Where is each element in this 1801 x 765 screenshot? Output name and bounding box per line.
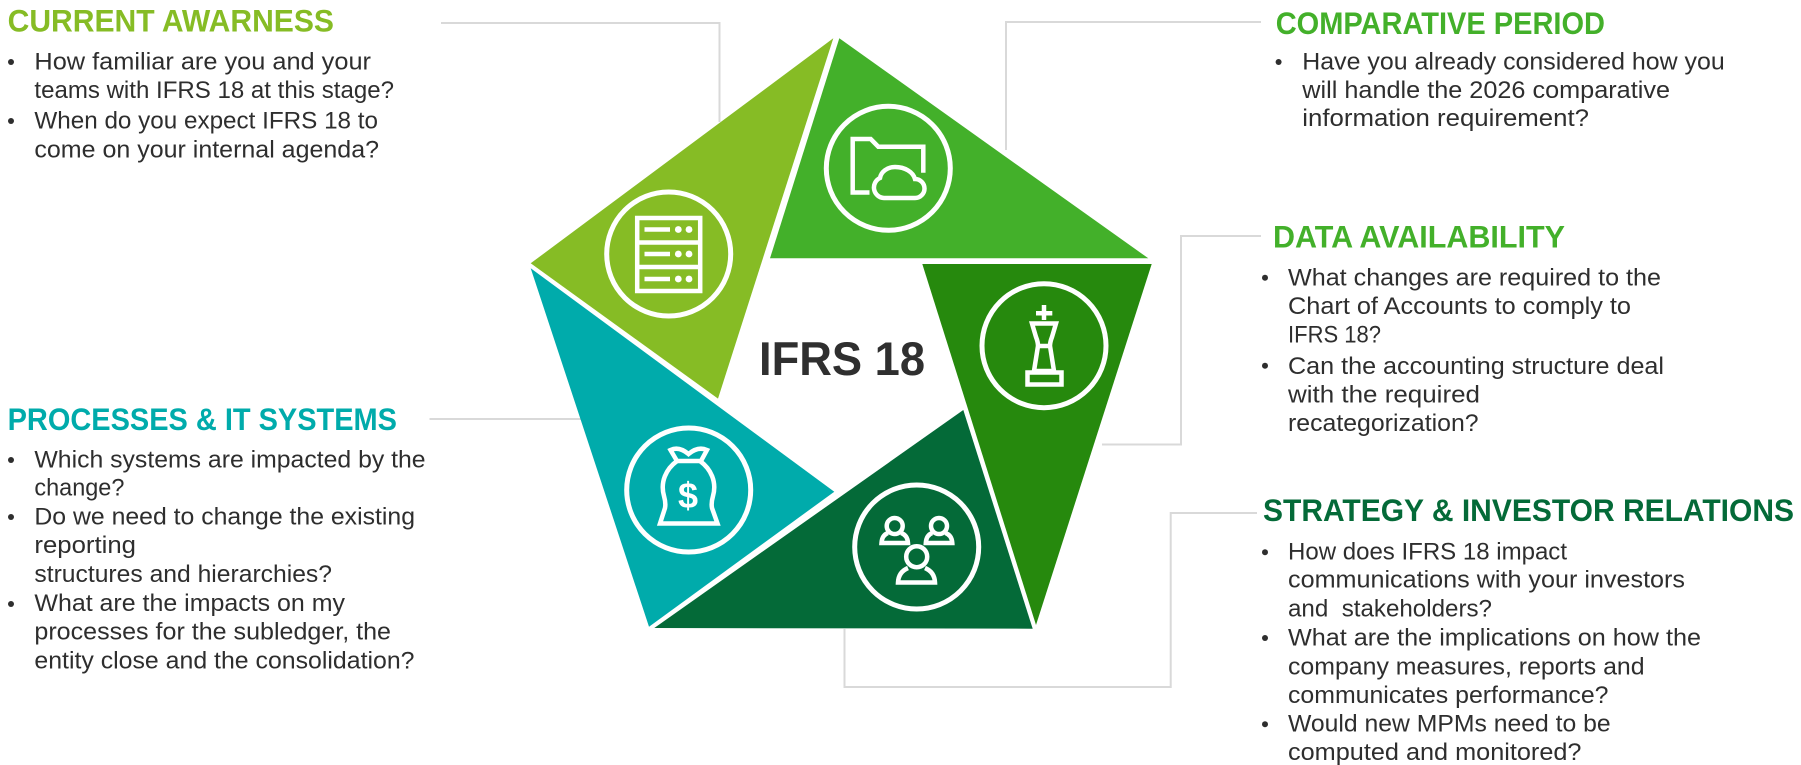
connector: strategy and investor relations [844,513,1257,687]
heading: DATA AVAILABILITY [1273,218,1565,254]
bullet list: change? [34,475,124,502]
bullet list [1262,538,1701,765]
heading: CURRENT AWARNESS [8,3,334,39]
icon: money bag [660,449,718,524]
segment: processes and IT systems [531,268,834,627]
bullet list: reporting [34,532,136,559]
bullet list: information requirement? [1302,105,1589,132]
pentagon diagram [531,38,1152,629]
panel: processes and IT systems [8,401,426,674]
heading: COMPARATIVE PERIOD [1276,5,1605,41]
segment: comparative period [770,38,1148,258]
bullet list [8,48,394,163]
panel: current awareness [8,3,394,163]
segment: current awareness [531,38,833,399]
connector: comparative period [1006,22,1261,150]
panel: comparative period [1276,5,1725,132]
bullet list: teams with IFRS 18 at this stage? [34,77,394,104]
bullet list: When do you expect IFRS 18 to [34,107,378,134]
heading: PROCESSES & IT SYSTEMS [8,401,397,437]
icon: chess king [1028,305,1062,384]
icon: server rack [637,218,700,291]
icon: three people [882,518,952,582]
bullet list: Can the accounting structure deal [1288,353,1664,380]
segment: strategy and investor relations [654,410,1033,629]
bullet list: Which systems are impacted by the [34,446,426,473]
connector: processes and IT systems [430,418,582,420]
bullet list [1262,265,1664,437]
bullet list: and stakeholders? [1288,595,1492,622]
center label: IFRS 18 [759,332,925,385]
bullet list: What changes are required to the [1288,265,1661,292]
icon: folder with cloud [853,139,924,198]
panel: data availability [1262,218,1664,437]
bullet list: come on your internal agenda? [34,136,379,163]
bullet list: communications with your investors [1288,567,1685,594]
connector: data availability [1102,236,1261,444]
bullet list: What are the impacts on my [34,590,346,617]
bullet list: How does IFRS 18 impact [1288,538,1567,565]
bullet list: with the required [1287,381,1480,408]
connector: current awareness [441,23,720,122]
bullet list: How familiar are you and your [34,48,371,76]
bullet list: communicates performance? [1288,682,1608,709]
bullet list: recategorization? [1288,410,1479,437]
bullet list: What are the implications on how the [1288,625,1701,652]
icon: money bag: $ [678,475,698,516]
bullet list: Would new MPMs need to be [1288,711,1611,738]
bullet list [8,446,426,674]
bullet list: company measures, reports and [1288,653,1645,680]
bullet list: Do we need to change the existing [34,503,415,530]
bullet list: entity close and the consolidation? [34,647,414,674]
bullet list: Have you already considered how you [1302,48,1725,76]
bullet list: will handle the 2026 comparative [1301,77,1670,104]
bullet list: Chart of Accounts to comply to [1288,293,1631,320]
bullet list [1276,48,1725,132]
bullet list: IFRS 18? [1288,322,1381,349]
bullet list: processes for the subledger, the [34,619,391,646]
panel: strategy and investor relations [1262,492,1794,765]
segment: data availability [922,264,1152,625]
bullet list: structures and hierarchies? [34,561,332,588]
